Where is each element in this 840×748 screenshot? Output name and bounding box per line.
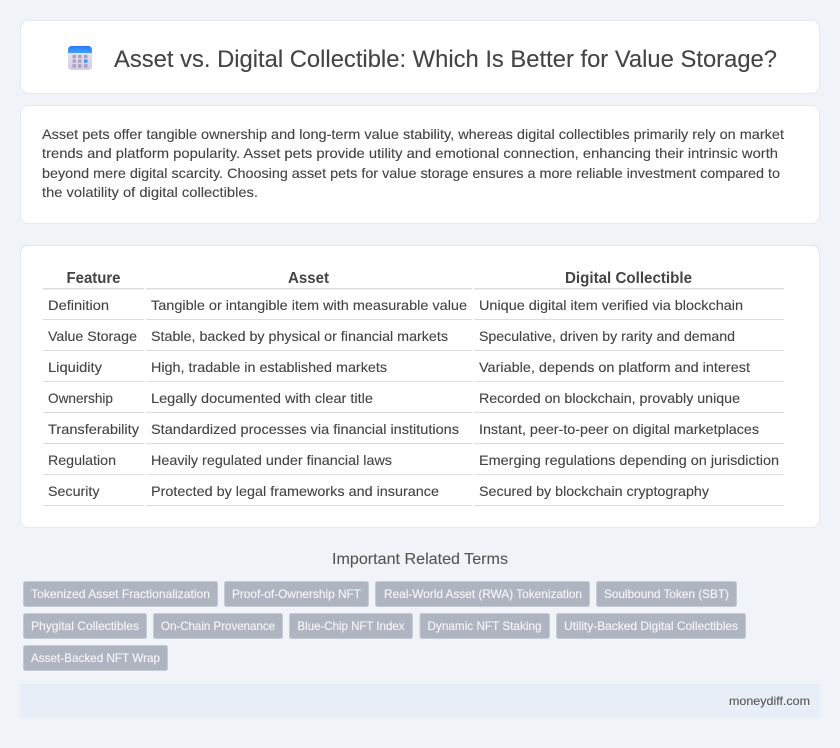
row: Liquidity [43, 359, 784, 382]
table header: Digital Collectible [565, 270, 692, 287]
tag: Utility-Backed Digital Collectibles [564, 619, 738, 633]
icon: calendar [68, 46, 92, 70]
tag: Real-World Asset (RWA) Tokenization [384, 587, 582, 601]
tag [24, 646, 168, 670]
tag [24, 614, 146, 638]
tag [556, 614, 746, 638]
row: Transferability: Transferability [48, 421, 139, 437]
row: Definition: Definition [48, 297, 109, 313]
row: Transferability: Standardized processes via financial institutions [151, 421, 459, 437]
row: Value Storage: Value Storage [48, 328, 137, 344]
tag: Tokenized Asset Fractionalization [31, 587, 210, 601]
tag: Soulbound Token (SBT) [604, 587, 729, 601]
tag [154, 614, 282, 638]
related term tags [24, 582, 746, 670]
row: Transferability: Instant, peer-to-peer on digital marketplaces [479, 421, 759, 437]
text block: description: Asset pets offer tangible ownership and long-term value stability, whereas digital collectibles primarily rely on market [42, 126, 784, 142]
row: Security: Protected by legal frameworks and insurance [151, 483, 439, 499]
row: Security [43, 483, 784, 506]
row: Regulation: Heavily regulated under financial laws [151, 452, 392, 468]
text block: description: the volatility of digital collectibles. [42, 184, 258, 200]
tag [24, 582, 218, 606]
text block: description [42, 126, 784, 200]
text block: description: beyond mere digital scarcity. Choosing asset pets for value storage ensures a more reliable investment compared to [42, 165, 780, 181]
row: Ownership: Legally documented with clear title [151, 390, 373, 406]
panel: header [20, 20, 820, 94]
row: Liquidity: High, tradable in established markets [151, 359, 387, 375]
tag [290, 614, 412, 638]
panel: comparison table [20, 246, 820, 528]
row: Definition [43, 297, 784, 320]
row: Ownership: Recorded on blockchain, provably unique [479, 390, 740, 406]
row: Ownership [43, 390, 784, 413]
tag: Proof-of-Ownership NFT [232, 587, 362, 601]
tag: Phygital Collectibles [31, 619, 139, 633]
row: Regulation: Regulation [48, 452, 116, 468]
tag [420, 614, 550, 638]
row: Regulation [43, 452, 784, 475]
row: Liquidity: Liquidity [48, 359, 102, 375]
heading: related terms: Important Related Terms [332, 551, 508, 568]
tag: Dynamic NFT Staking [428, 619, 542, 633]
tag [224, 582, 368, 606]
footer source: moneydiff.com [729, 694, 810, 708]
tag: Blue-Chip NFT Index [298, 619, 404, 633]
row: Definition: Tangible or intangible item with measurable value [151, 297, 467, 313]
row: Security: Secured by blockchain cryptography [479, 483, 709, 499]
table header: Asset [288, 270, 330, 287]
panel: description [20, 106, 820, 224]
row: Definition: Unique digital item verified via blockchain [479, 297, 743, 313]
tag: Asset-Backed NFT Wrap [31, 651, 160, 665]
table header [43, 270, 784, 290]
footer bar [20, 684, 820, 718]
row: Regulation: Emerging regulations depending on jurisdiction [479, 452, 779, 468]
tag [376, 582, 590, 606]
row: Transferability [43, 421, 784, 444]
row: Value Storage [43, 328, 784, 351]
row: Value Storage: Speculative, driven by rarity and demand [479, 328, 735, 344]
text block: description: trends and platform popularity. Asset pets provide utility and emotional connection, enhancing their intrinsic worth [42, 145, 778, 161]
title: Asset vs. Digital Collectible: Which Is Better for Value Storage? [114, 46, 777, 73]
row: Security: Security [48, 483, 100, 499]
tag [596, 582, 736, 606]
table header: Feature [66, 270, 121, 287]
row: Liquidity: Variable, depends on platform and interest [479, 359, 750, 375]
tag: On-Chain Provenance [161, 619, 275, 633]
row: Ownership: Ownership [48, 390, 113, 406]
row: Value Storage: Stable, backed by physical or financial markets [151, 328, 448, 344]
